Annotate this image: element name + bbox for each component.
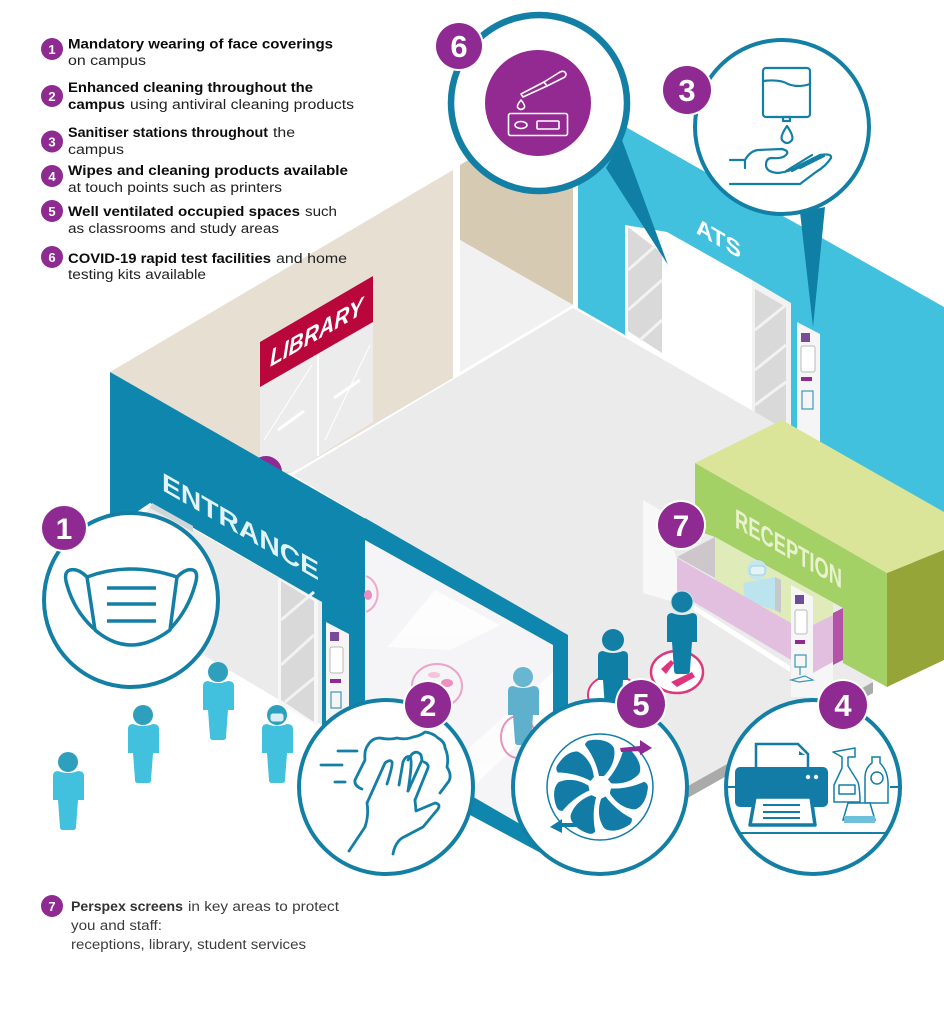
- floor sticker behind glass: [412, 664, 462, 708]
- legend item 7: [41, 895, 339, 952]
- library wall: [110, 170, 453, 500]
- legend item 3: the: [273, 125, 295, 140]
- badge 2: [403, 680, 453, 730]
- legend item 7: Perspex screens: [71, 899, 183, 914]
- entrance wall: [110, 372, 385, 735]
- legend item 1: on campus: [68, 53, 146, 68]
- legend item 3: [41, 125, 295, 157]
- legend item 3: Sanitiser stations throughout: [68, 125, 269, 140]
- library sign: LIBRARY: [270, 292, 365, 373]
- badge 4: [817, 679, 869, 731]
- legend item 6: testing kits available: [68, 267, 206, 282]
- legend item 7: in key areas to protect: [188, 899, 339, 914]
- ATS wall: [578, 100, 944, 600]
- legend item 3: 3: [48, 134, 56, 150]
- legend item 2: Enhanced cleaning throughout the: [68, 80, 314, 95]
- badge 4: 4: [834, 688, 852, 723]
- tan corridor wall: [460, 147, 573, 305]
- ring: [695, 40, 869, 214]
- person: [262, 705, 293, 783]
- icon: test kit: [485, 50, 591, 156]
- library doors: [260, 322, 373, 472]
- perspex screen end: [833, 608, 843, 665]
- building illustration: [110, 100, 944, 866]
- legend item 2: campus: [68, 97, 125, 112]
- person: [128, 705, 159, 783]
- icon: spray bottle: [833, 748, 860, 802]
- badge 2: 2: [420, 690, 436, 723]
- glass screen: [365, 540, 553, 850]
- reception white panel: [643, 500, 677, 603]
- legend item 5: such: [305, 204, 337, 219]
- reception side: [887, 550, 944, 687]
- badge 5: 5: [632, 687, 650, 722]
- entrance frame right post: [553, 635, 568, 850]
- legend item 7: receptions, library, student services: [71, 937, 306, 952]
- reception sign: RECEPTION: [735, 504, 842, 595]
- floor sticker behind glass: [364, 576, 378, 612]
- legend item 5: [41, 200, 337, 236]
- perspex screen front: [677, 558, 833, 673]
- callout 6: rapid test: [434, 15, 668, 265]
- reception sanitiser poster: [791, 585, 813, 697]
- ring: [513, 700, 687, 874]
- callout 3: sanitiser station: [661, 40, 869, 327]
- floor sticker: [651, 651, 703, 693]
- person in queue: [598, 629, 628, 708]
- legend item 3: campus: [68, 142, 124, 157]
- badge 1: 1: [56, 513, 72, 546]
- floor sticker: [588, 675, 638, 715]
- legend item 1: [41, 36, 333, 68]
- legend item 4: at touch points such as printers: [68, 180, 282, 195]
- glass reflections: [388, 590, 553, 790]
- ring: [451, 15, 627, 191]
- reception front: [695, 463, 887, 687]
- legend item 6: COVID-19 rapid test facilities: [68, 251, 271, 266]
- reception lower panel: [813, 662, 833, 700]
- entrance frame bottom: [470, 795, 565, 866]
- person: [53, 752, 84, 830]
- ring: [44, 513, 218, 687]
- counter white edge: [677, 594, 790, 672]
- legend item 4: [41, 163, 349, 195]
- floor: [293, 308, 873, 845]
- entrance frame top: [365, 518, 568, 650]
- reception staff member: [743, 560, 781, 613]
- person: [203, 662, 234, 740]
- purple badge hidden behind entrance: [250, 456, 282, 488]
- ring: [299, 700, 473, 874]
- floor side edge: [640, 682, 873, 825]
- badge 6: 6: [450, 29, 468, 64]
- badge 1: [40, 504, 88, 552]
- legend item 5: as classrooms and study areas: [68, 221, 279, 236]
- callout 4: printer and cleaning products: [725, 679, 901, 874]
- legend item 6: [41, 246, 347, 282]
- legend item 1: Mandatory wearing of face coverings: [68, 36, 333, 52]
- entrance sanitiser poster: [326, 622, 349, 735]
- badge 3: 3: [678, 73, 696, 108]
- icon: fan: [547, 734, 653, 840]
- badge 5: [615, 678, 667, 730]
- callout badge 7: [656, 500, 706, 550]
- arrow: clockwise blue: [550, 819, 581, 833]
- icon: wipes pack: [843, 803, 875, 823]
- pointer: [800, 207, 825, 327]
- legend item 5: Well ventilated occupied spaces: [68, 204, 300, 219]
- entrance sign: ENTRANCE: [162, 467, 319, 586]
- icon: detergent bottle: [865, 757, 888, 803]
- ring: [726, 700, 900, 874]
- legend item 2: 2: [48, 89, 56, 104]
- entrance door glass: [278, 578, 318, 726]
- legend item 2: [41, 80, 354, 112]
- legend item 6: and home: [276, 251, 347, 266]
- legend item 7: 7: [48, 899, 56, 914]
- pointer: [606, 140, 668, 265]
- callout 5: ventilation: [513, 678, 687, 874]
- legend item 7: you and staff:: [71, 918, 162, 933]
- legend item 5: 5: [48, 204, 56, 219]
- badge 6: [434, 21, 484, 71]
- legend item 4: 4: [48, 169, 56, 184]
- ATS sign: ATS: [696, 214, 741, 265]
- floor sticker behind glass: [501, 716, 535, 758]
- arrow: clockwise purple: [620, 740, 652, 755]
- person behind glass: [508, 667, 539, 745]
- queue of people wearing masks: [53, 662, 293, 830]
- icon: face mask: [66, 569, 197, 645]
- shelf lines: [725, 787, 901, 833]
- person in queue: [667, 591, 697, 674]
- ATS doors: [625, 225, 791, 437]
- perspex screen side: [677, 537, 715, 578]
- callout badge 7: 7: [673, 510, 689, 543]
- icon: printer: [735, 744, 828, 825]
- legend item 2: using antiviral cleaning products: [130, 97, 354, 112]
- corridor lower wall: [460, 240, 573, 372]
- legend: [41, 36, 354, 282]
- icon: hand wiping: [321, 732, 450, 854]
- reception roof: [695, 420, 944, 573]
- legend item 6: 6: [48, 250, 56, 265]
- callout 2: cleaning: [299, 680, 473, 874]
- legend item 1: 1: [48, 42, 56, 57]
- entrance opening interior: [110, 505, 322, 725]
- legend item 4: Wipes and cleaning products available: [68, 163, 349, 178]
- callout 1: face mask: [40, 504, 218, 687]
- badge 3: [661, 64, 713, 116]
- ATS sanitiser poster: [797, 322, 820, 447]
- icon: dispenser and hand: [730, 68, 831, 184]
- reception inner wall: [715, 537, 833, 625]
- entrance door frame strip: [150, 503, 193, 532]
